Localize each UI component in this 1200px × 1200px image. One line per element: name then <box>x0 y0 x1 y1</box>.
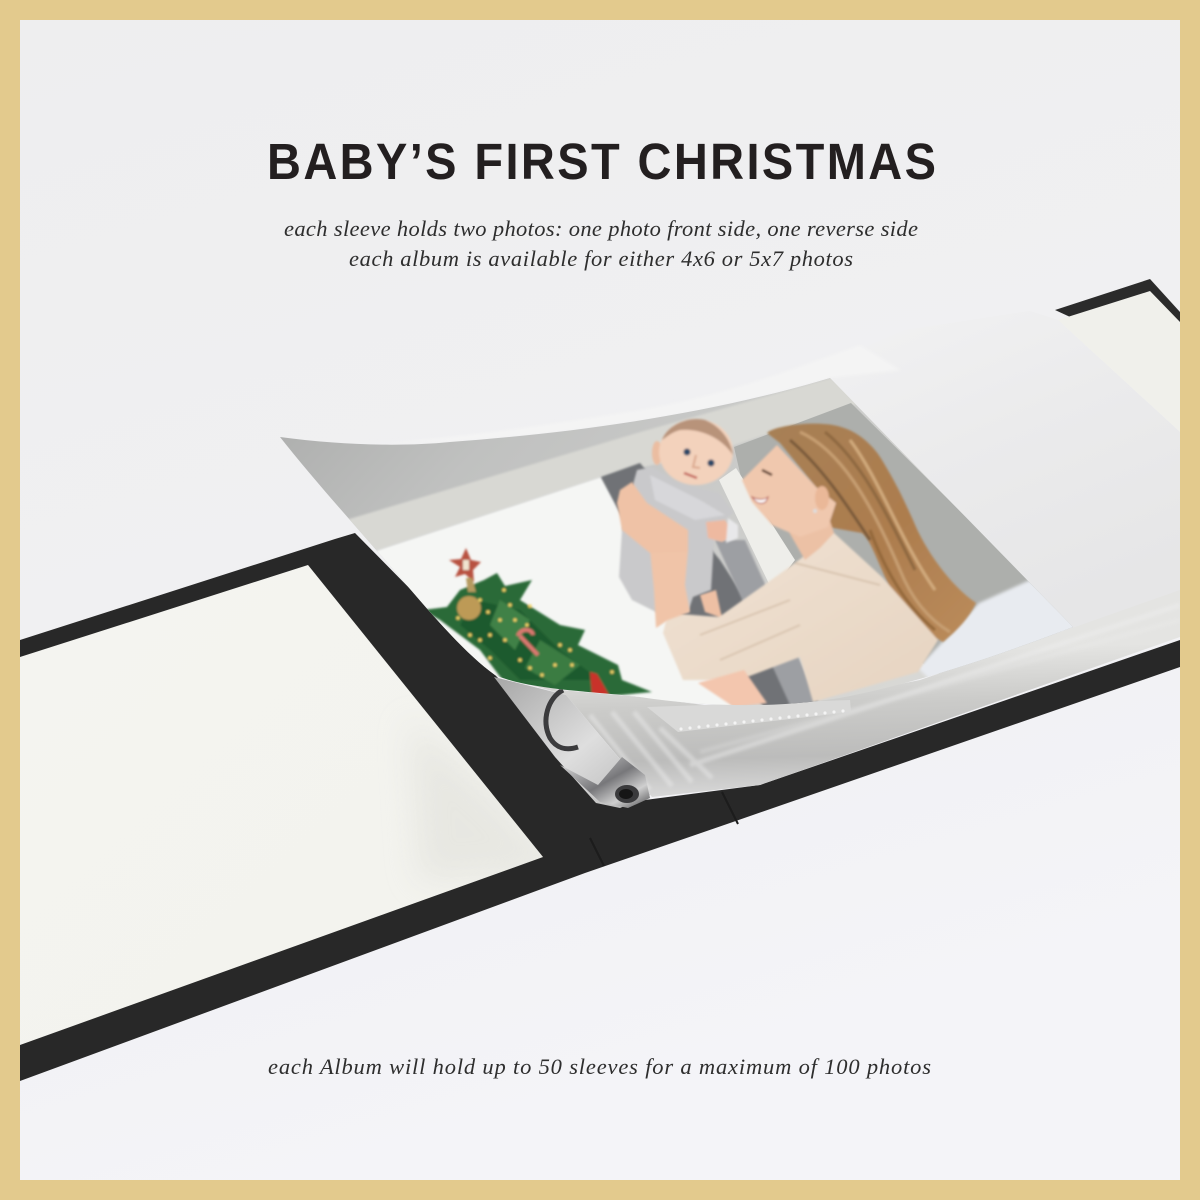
mother's smile <box>752 497 768 503</box>
hair back <box>767 424 976 642</box>
translucent sleeves stack <box>800 311 1180 640</box>
red ornament <box>590 672 609 695</box>
rolled sleeves <box>495 590 1180 797</box>
baby outfit <box>618 468 714 612</box>
pillow bottom right <box>920 580 1073 677</box>
baby <box>619 419 767 707</box>
bottom caption: each Album will hold up to 50 sleeves for a maximum of 100 photos <box>268 1054 931 1079</box>
window white <box>376 476 731 705</box>
fairy lights <box>456 588 614 677</box>
mother's ear and earring <box>813 486 829 513</box>
cover stitching creases <box>590 792 738 866</box>
binder ring <box>546 690 578 749</box>
ring hinge <box>560 757 650 808</box>
album cover: black <box>20 533 1180 1081</box>
face <box>742 445 836 537</box>
curtain <box>601 463 815 708</box>
mother <box>663 424 976 702</box>
ring metal plate <box>494 677 650 808</box>
gold ornament <box>457 596 481 620</box>
sweater folds <box>700 563 880 660</box>
baby head <box>652 419 733 485</box>
photo: mother and baby <box>270 370 1090 720</box>
christmas tree <box>423 548 652 698</box>
subtitle line 2: each album is available for either 4x6 or 5x7 photos <box>349 246 853 271</box>
title: BABY’S FIRST CHRISTMAS <box>267 133 936 190</box>
baby hand <box>706 520 728 543</box>
right cover corner <box>1055 279 1180 432</box>
neck <box>789 522 835 560</box>
moulding band <box>346 378 860 552</box>
baby cuff <box>726 518 738 543</box>
album <box>20 279 1180 1081</box>
hair strands <box>790 432 950 632</box>
mother's arm and hand <box>617 482 690 628</box>
second forearm <box>700 590 722 618</box>
rolled sleeves and rings <box>494 590 1180 808</box>
subtitle line 1: each sleeve holds two photos: one photo front side, one reverse side <box>284 216 918 241</box>
grey wall right <box>734 403 1073 674</box>
tree star <box>449 548 481 582</box>
candy cane <box>518 630 538 655</box>
mother's eye <box>762 470 772 475</box>
curled sheet edge <box>330 345 900 445</box>
baby feet <box>698 670 767 707</box>
sleeve ripples <box>590 605 1180 790</box>
left inner page <box>20 565 560 1045</box>
wall upper left <box>280 378 954 704</box>
window frame <box>719 468 795 590</box>
sweater <box>663 533 938 702</box>
sleeve pocket with punched holes <box>647 700 851 732</box>
